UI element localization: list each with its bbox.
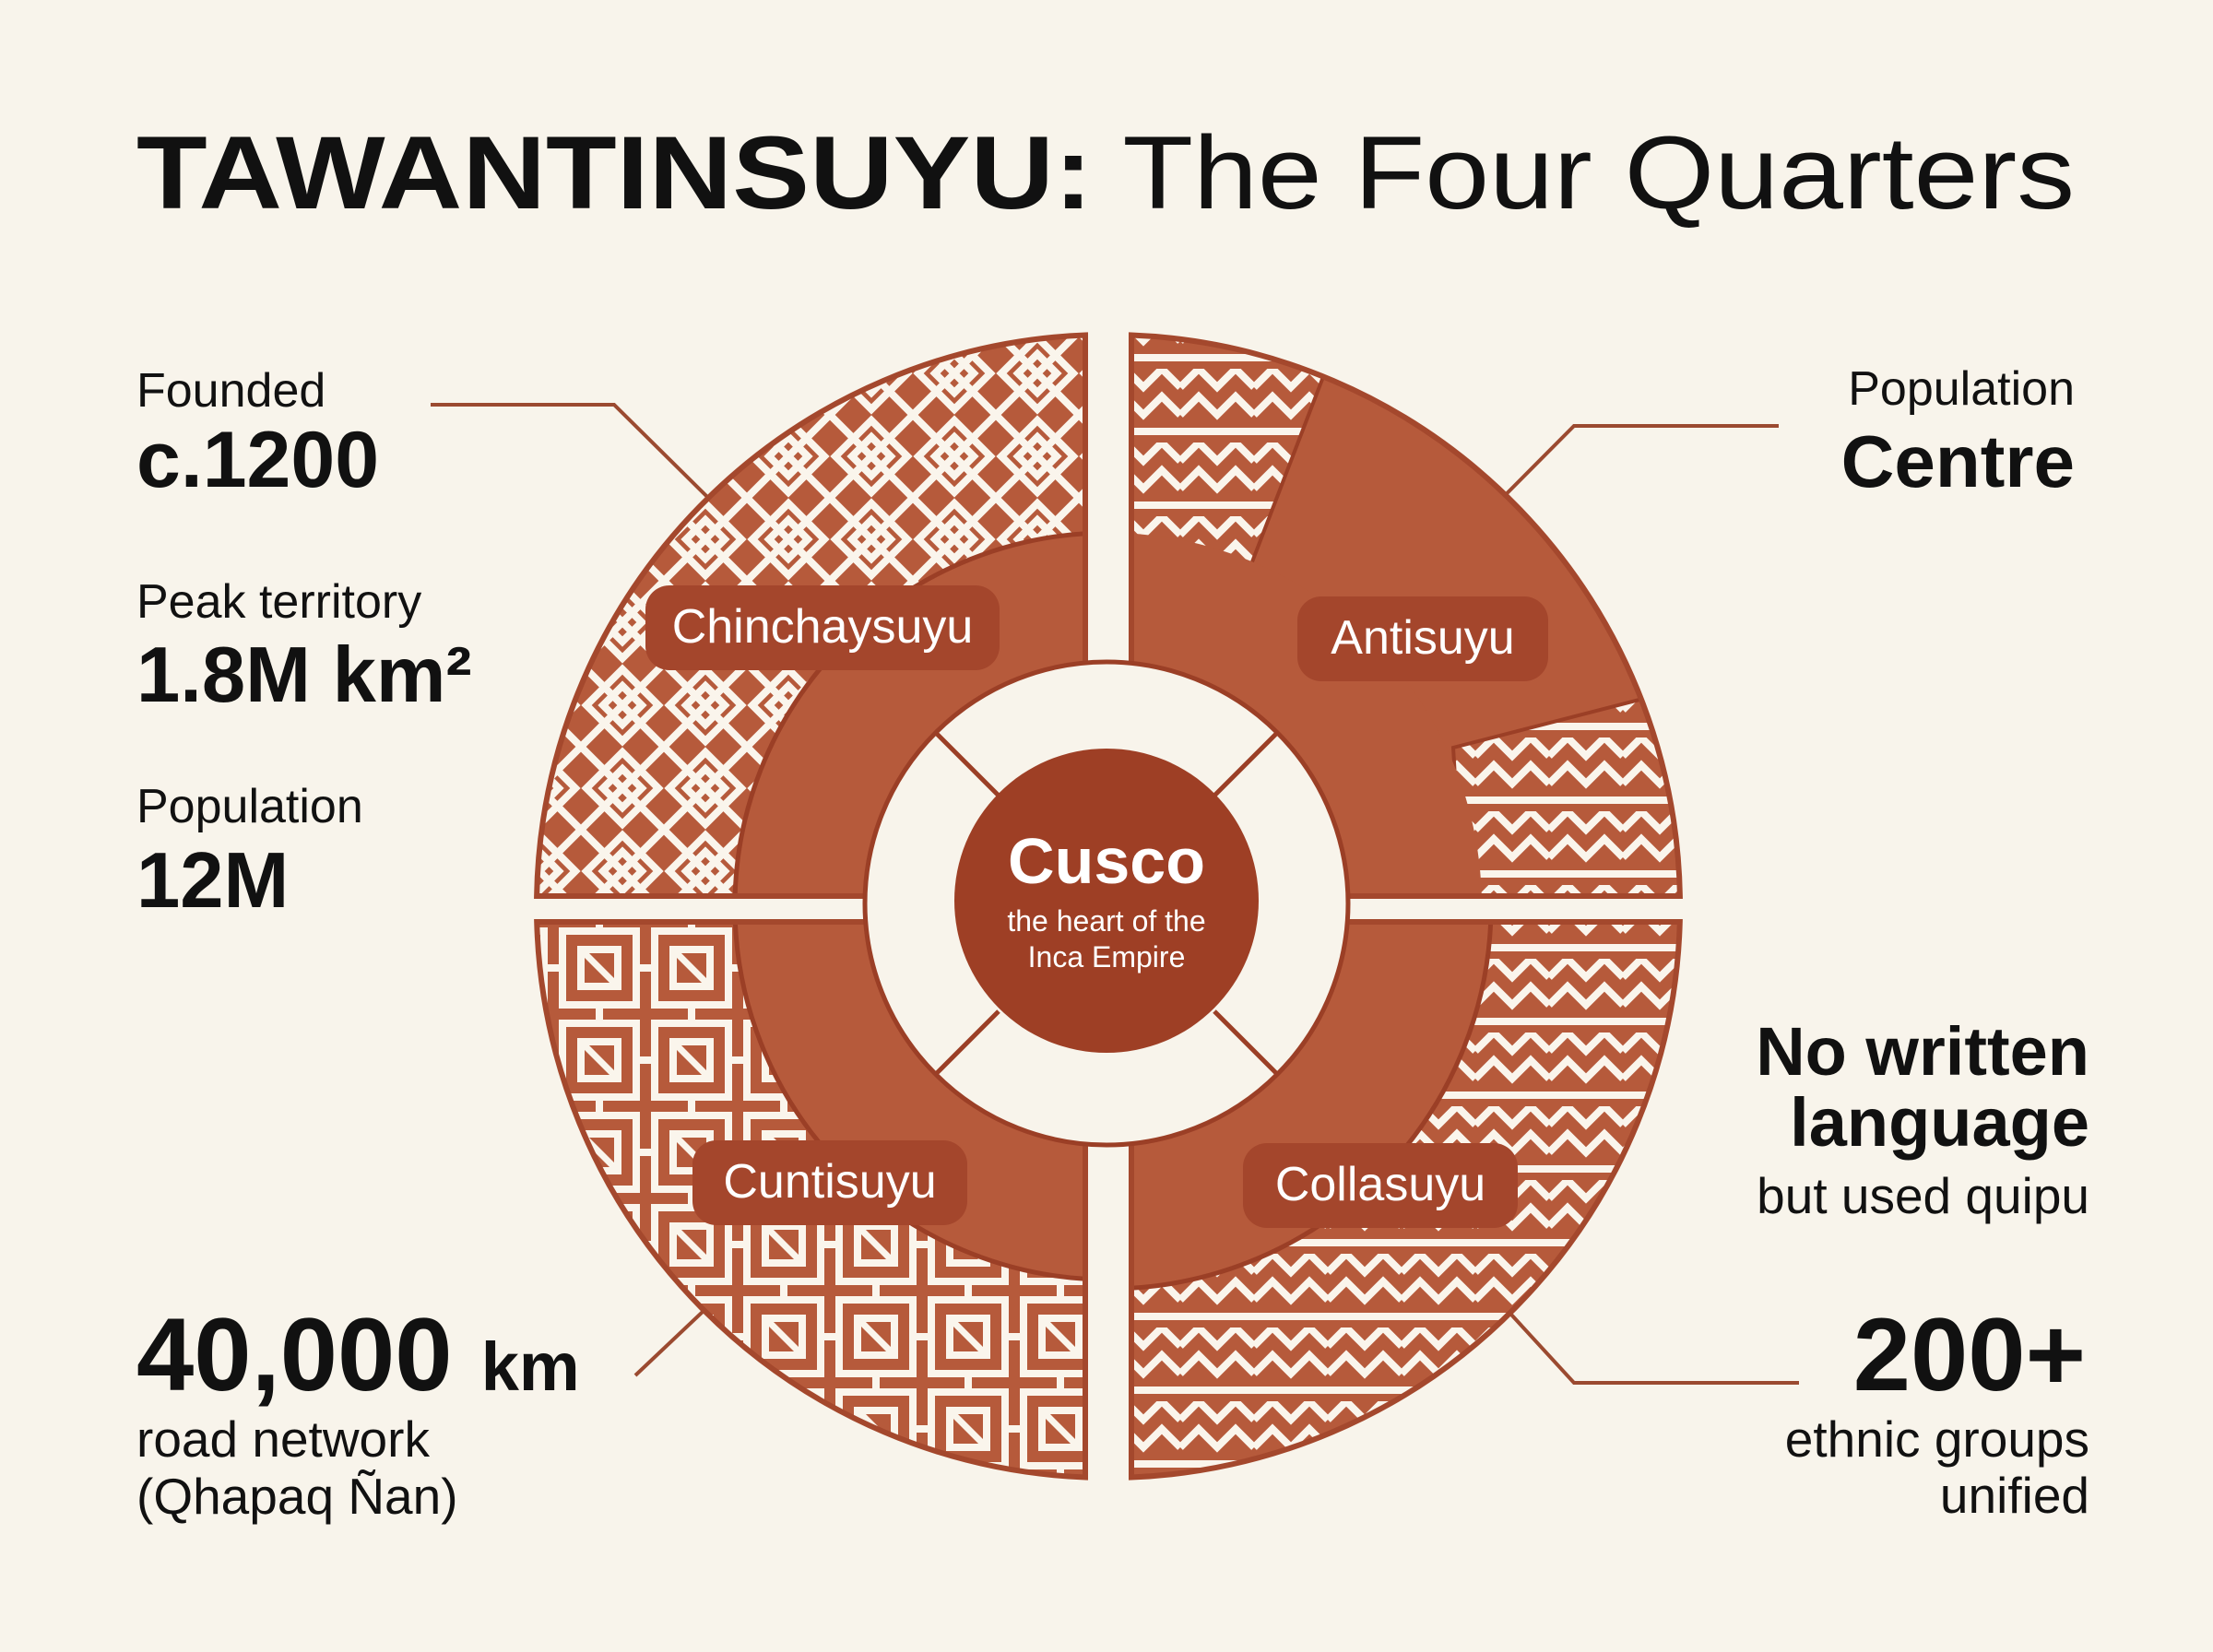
stat: founded: c.1200 <box>136 416 379 504</box>
stat: ethnic groups: unified <box>1940 1467 2089 1524</box>
label: Collasuyu: Collasuyu <box>1275 1158 1485 1211</box>
quadrant: Collasuyu <box>1129 919 1683 1481</box>
stat: ethnic groups <box>1785 1297 2089 1524</box>
stat: founded <box>136 364 379 504</box>
stat: population: Population <box>136 780 363 833</box>
label: Chinchaysuyu: Chinchaysuyu <box>672 600 973 654</box>
inner ring <box>865 662 1348 1145</box>
label: Cuntisuyu <box>692 1140 967 1225</box>
stat: writing: No written <box>1756 1013 2089 1090</box>
title: TAWANTINSUYU: The Four Quarters <box>136 115 2075 230</box>
stat: writing <box>1756 1013 2089 1224</box>
leader lines <box>431 405 1799 1383</box>
label: Antisuyu: Antisuyu <box>1331 611 1515 665</box>
stat: population centre <box>1841 362 2075 502</box>
stat: population: 12M <box>136 837 289 925</box>
stat: writing: but used quipu <box>1757 1167 2089 1224</box>
quadrant: Cuntisuyu <box>534 919 1088 1481</box>
stat: territory: Peak territory <box>136 575 421 629</box>
stat: road network: road network <box>136 1410 430 1468</box>
stat: territory <box>136 575 472 719</box>
quadrant: Chinchaysuyu <box>534 332 1088 899</box>
stat: population centre: Population <box>1848 362 2075 416</box>
stat: writing: language <box>1790 1084 2089 1161</box>
center: Cusco: Inca Empire <box>1028 940 1185 974</box>
quadrant: Antisuyu <box>1129 332 1683 899</box>
stat: road network: 40,000 km <box>136 1297 580 1412</box>
stat: territory: 1.8M km² <box>136 631 472 719</box>
stat: road network: (Qhapaq Ñan) <box>136 1468 458 1525</box>
center: Cusco: the heart of the <box>1007 904 1206 938</box>
center: Cusco <box>954 749 1259 1053</box>
stat: ethnic groups: 200+ <box>1853 1297 2086 1412</box>
label: Collasuyu <box>1243 1143 1518 1228</box>
stat: ethnic groups: ethnic groups <box>1785 1410 2089 1468</box>
stat: population centre: Centre <box>1841 420 2075 502</box>
label: Chinchaysuyu <box>645 585 1000 670</box>
stat: road network <box>136 1297 580 1525</box>
stat: population <box>136 780 363 925</box>
stat: founded: Founded <box>136 364 325 418</box>
label: Cuntisuyu: Cuntisuyu <box>723 1155 937 1209</box>
label: Antisuyu <box>1297 596 1548 681</box>
center: Cusco: Cusco <box>1008 825 1205 897</box>
